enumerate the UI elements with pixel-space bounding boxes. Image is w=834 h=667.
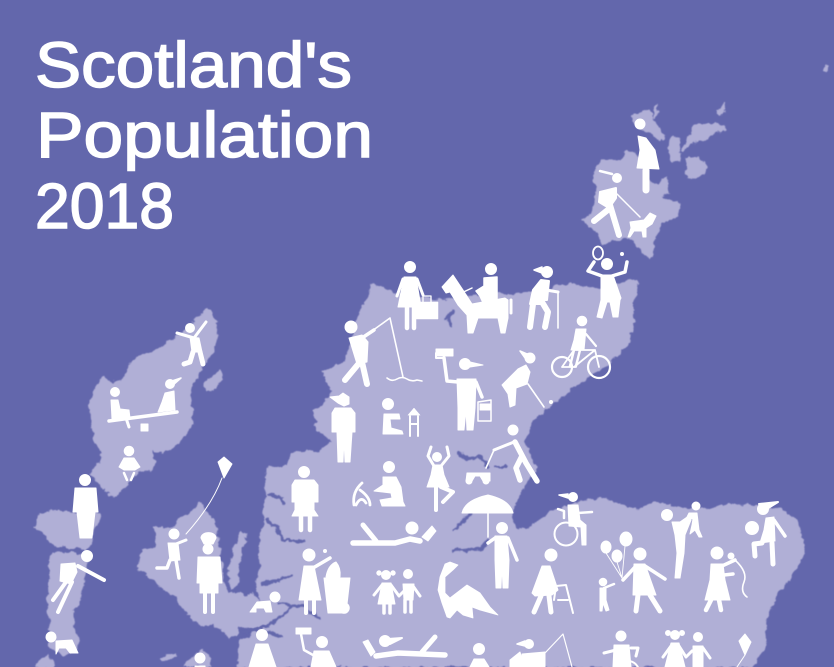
figure: dog bbox=[628, 213, 656, 237]
figure: campfire bbox=[354, 483, 370, 505]
figure: man in kilt bbox=[292, 466, 318, 530]
figure: horse rider bbox=[442, 264, 511, 333]
figure: dancer on Uist bbox=[53, 550, 104, 612]
title: Scotland's bbox=[35, 29, 352, 101]
figure: man with cap and tie bbox=[330, 393, 355, 462]
figure: person with walker bbox=[532, 549, 573, 613]
figure: two children holding hands bbox=[374, 570, 420, 613]
figure: pregnant woman bbox=[635, 119, 659, 190]
figure: child with blocks bbox=[382, 398, 420, 436]
figure: jumping person on Lewis bbox=[177, 322, 206, 364]
Barra bbox=[36, 655, 54, 667]
figure: person pushing lawnmower bbox=[466, 425, 537, 484]
figure: standing man bbox=[73, 474, 98, 538]
figure: baby bbox=[119, 446, 140, 480]
figure: woman with rod, lower bbox=[510, 634, 572, 667]
figure: man with umbrella bbox=[462, 495, 517, 588]
figure: child flying kite bbox=[157, 457, 232, 578]
figure: person in wheelchair, lower bbox=[604, 631, 639, 667]
figure: angler bbox=[345, 318, 422, 384]
figure: painter lower bbox=[296, 628, 336, 667]
Skye bbox=[137, 503, 280, 637]
figure: woman lying reading, lower bbox=[363, 636, 445, 656]
figure: kite, lower bbox=[737, 634, 751, 667]
South Uist bbox=[47, 553, 90, 655]
Shetland northern isles bbox=[632, 103, 726, 178]
Small isle south bbox=[183, 650, 210, 667]
figure: woman with suitcase bbox=[397, 262, 438, 328]
figure: Loch Ness monster bbox=[438, 562, 498, 618]
figure: wheelchair user bbox=[554, 492, 592, 546]
figure: ballerina bbox=[427, 447, 453, 510]
figure: crawler on Barra bbox=[46, 632, 78, 654]
figure: crawling baby bbox=[250, 592, 280, 612]
North Uist bbox=[35, 511, 100, 548]
Shiant isle bbox=[203, 370, 222, 390]
figure: person lying reading bbox=[353, 522, 436, 543]
figure: elderly person with cane bbox=[530, 266, 558, 328]
figure: golfer bbox=[502, 351, 552, 407]
figure: woman walking dog bbox=[594, 171, 640, 235]
figure: woman using bin bbox=[299, 549, 350, 613]
figure: chef bbox=[197, 533, 222, 612]
title bbox=[35, 29, 373, 242]
title: 2018 bbox=[35, 170, 174, 242]
Small isle bbox=[245, 593, 258, 606]
figure: children on seesaw bbox=[109, 378, 181, 431]
Lewis and Harris bbox=[90, 310, 218, 497]
figure: tennis player bbox=[588, 246, 627, 318]
figure: painter with roller bbox=[436, 349, 491, 430]
title: Population bbox=[36, 99, 373, 171]
figure: head on small isle bbox=[195, 653, 205, 667]
figure: cyclist bbox=[552, 316, 610, 378]
figures bbox=[46, 119, 785, 667]
figure: person sitting by fire bbox=[374, 462, 405, 506]
figure: adult lifting child bbox=[662, 502, 702, 578]
figure: balloons with mother and child bbox=[599, 532, 665, 611]
figure: man bottom centre bbox=[470, 644, 489, 667]
map: sea lochs and firths bbox=[238, 310, 505, 636]
Raasay bbox=[229, 532, 246, 590]
figure: woman lower left bbox=[249, 630, 276, 667]
figure: two children, lower bbox=[663, 630, 710, 667]
Shetland main bbox=[583, 150, 680, 258]
figure: footballer bbox=[746, 502, 785, 564]
figure: woman singing bbox=[705, 547, 747, 610]
mainland bbox=[238, 280, 804, 667]
